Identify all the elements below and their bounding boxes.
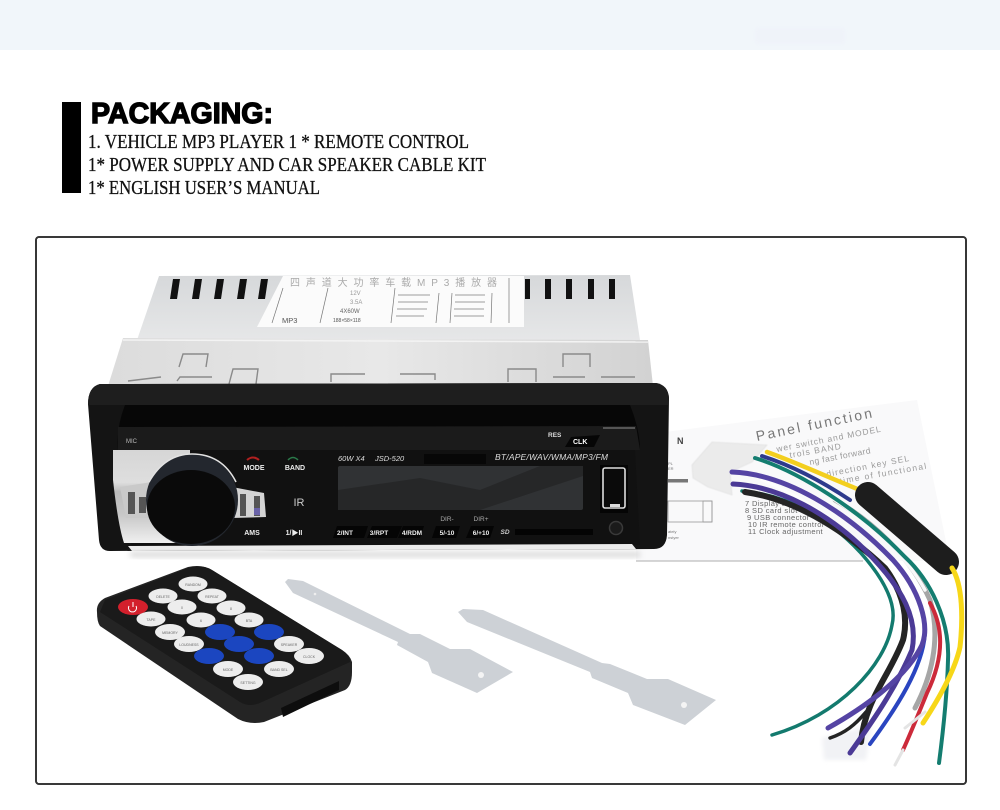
- spec label sticker: 4X60W: [340, 309, 360, 315]
- numbered preset buttons: 3/RPT: [370, 530, 388, 537]
- spec label sticker: [257, 276, 524, 327]
- instruction manual sheet: 9 USB connector: [747, 513, 810, 522]
- button captions: CLOCK: [303, 655, 316, 659]
- product photo frame: [36, 237, 966, 784]
- button captions: SETTING: [240, 681, 256, 685]
- packing list text: 1* ENGLISH USER’S MANUAL: [88, 177, 320, 199]
- manual text lines: ng fast forward: [808, 445, 872, 467]
- mic label: MIC: [126, 439, 138, 445]
- mode band buttons: MODE: [244, 465, 265, 472]
- mode band buttons: 1/▶II: [286, 529, 302, 537]
- instruction manual sheet: 8 SD card slot: [745, 506, 798, 515]
- bottom chrome strip: [128, 544, 636, 551]
- vent slots left: [170, 279, 268, 299]
- spec label sticker: 四声道大功率车载MP3播放器: [290, 276, 497, 289]
- knob dome: [146, 454, 238, 546]
- white buttons: [136, 576, 324, 690]
- model text: JSD-520: [374, 454, 405, 463]
- button captions: SPEAKER: [281, 643, 298, 647]
- spec label sticker: 3.5A: [350, 300, 362, 306]
- instruction manual sheet: N: [677, 436, 684, 446]
- packaging heading block: [62, 98, 486, 199]
- button captions: BTA: [246, 619, 253, 623]
- button captions: BAND SEL: [270, 668, 288, 672]
- black inline fuse tube: [868, 495, 946, 562]
- USB port: [600, 465, 628, 513]
- heading: packaging: PACKAGING:: [91, 98, 273, 130]
- packing list text: 1* POWER SUPPLY AND CAR SPEAKER CABLE KIT: [88, 154, 486, 176]
- spec label sticker: MP3: [282, 316, 297, 325]
- chrome left panel: [113, 450, 190, 543]
- frayed wire ends: [895, 712, 925, 765]
- instruction manual sheet: 10 IR remote control: [748, 520, 824, 529]
- model text: 60W X4: [338, 454, 365, 463]
- button captions: 8: [230, 607, 232, 611]
- manual text lines: time of functional: [839, 461, 927, 486]
- button captions: DELETE: [156, 595, 170, 599]
- manual device diagram: [668, 501, 712, 522]
- mode band buttons: AMS: [244, 530, 260, 537]
- frame right edge redraw: [36, 237, 966, 784]
- manual text lines: trols BAND: [789, 441, 842, 460]
- instruction manual sheet: [636, 400, 950, 561]
- instruction manual sheet: ately: [668, 529, 676, 534]
- button captions: RANDOM: [185, 583, 201, 587]
- button captions: REPEAT: [205, 595, 220, 599]
- spec label sticker: 12V: [350, 291, 361, 297]
- right chrome grip: [232, 487, 266, 518]
- numbered preset buttons: 5/-10: [440, 530, 455, 537]
- mounting bracket left: [285, 579, 513, 693]
- button captions: MEMORY: [162, 631, 179, 635]
- res and clk buttons: RES: [548, 432, 562, 439]
- front metal chassis: [108, 338, 653, 386]
- manual text lines: [774, 424, 927, 486]
- spec label sticker: 188×58×118: [333, 318, 361, 324]
- audio jack: [610, 522, 622, 534]
- button captions: TAPE: [147, 618, 156, 622]
- button captions: MODE: [223, 668, 234, 672]
- numbered preset buttons: [333, 516, 510, 538]
- numbered preset buttons: 2/INT: [337, 530, 353, 537]
- mode band buttons: BAND: [285, 465, 305, 472]
- white connector block: [692, 442, 767, 495]
- black accent bar: [62, 102, 81, 193]
- chassis tabs: [128, 354, 635, 384]
- remote body: [97, 566, 352, 723]
- LCD display: [338, 466, 583, 510]
- CD slot recess: [118, 405, 640, 450]
- left chrome grip: [120, 482, 152, 518]
- button captions: [147, 583, 316, 685]
- instruction manual sheet: nstyer: [668, 535, 680, 540]
- top metal plate: [137, 275, 640, 340]
- top banner band: [0, 0, 1000, 50]
- instruction manual sheet: 11 Clock adjustment: [748, 527, 824, 536]
- control panel background: [114, 450, 640, 546]
- instruction manual sheet: PL: [668, 461, 674, 466]
- yellow output wire: [923, 568, 962, 723]
- numbered preset buttons: 6/+10: [473, 530, 490, 537]
- packing list text: [88, 131, 486, 199]
- packing list text: 1. VEHICLE MP3 PLAYER 1 * REMOTE CONTROL: [88, 131, 469, 153]
- button captions: 6: [200, 619, 202, 623]
- frayed wire ends backdrop: [822, 725, 872, 760]
- IR sensor label: IR: [294, 497, 305, 509]
- instruction manual sheet: 7 Display area: [745, 499, 799, 508]
- volume knob: [120, 454, 266, 546]
- button captions: LOUDNESS: [179, 643, 199, 647]
- wiring harness: [692, 442, 962, 765]
- soft shadow under radio: [130, 552, 640, 557]
- battery tray: [281, 681, 339, 717]
- instruction manual sheet: ER: [668, 466, 674, 471]
- vent slots right: [525, 279, 615, 299]
- wire bundle: [742, 491, 893, 735]
- remote control: [97, 566, 352, 723]
- numbered preset buttons: SD: [500, 529, 510, 536]
- numbered preset buttons: 4/RDM: [402, 530, 422, 537]
- mounting bracket right: [458, 609, 716, 725]
- manual heading: Panel function: [754, 405, 873, 444]
- button captions: 0: [181, 606, 183, 610]
- res and clk buttons: CLK: [573, 439, 587, 446]
- blue buttons: [194, 624, 284, 664]
- model text: BT/APE/WAV/WMA/MP3/FM: [495, 452, 609, 462]
- power button: [118, 599, 148, 615]
- mode band buttons: [244, 458, 305, 537]
- SD card slot: [515, 529, 593, 535]
- manual text lines: direction key SEL: [825, 453, 910, 479]
- black faceplate: [88, 383, 669, 551]
- radio unit: [88, 275, 669, 551]
- numbered preset buttons: DIR-: [440, 516, 454, 523]
- manual text lines: wer switch and MODEL: [774, 424, 882, 454]
- model text: [338, 452, 609, 463]
- numbered preset buttons: DIR+: [474, 516, 489, 523]
- res and clk buttons: [548, 427, 635, 447]
